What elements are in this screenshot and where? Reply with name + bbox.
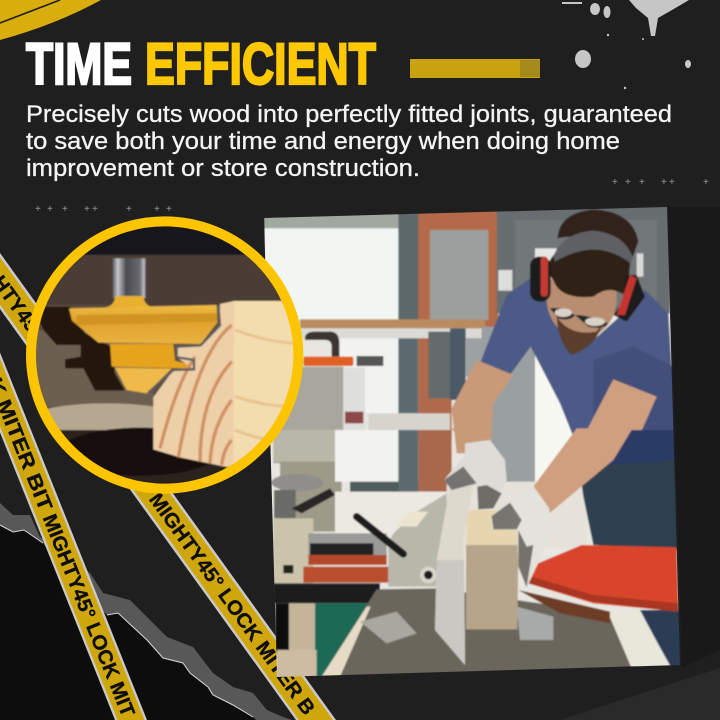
red disc bbox=[528, 545, 679, 612]
photo: man using router table bbox=[264, 203, 681, 678]
left glove bbox=[444, 439, 508, 482]
blurred backdrop bbox=[36, 226, 282, 484]
black fence profile bbox=[33, 307, 125, 391]
plus marks: right: + bbox=[661, 177, 667, 188]
wheel and vice bbox=[271, 474, 323, 491]
yellow ring bbox=[31, 221, 298, 489]
corner swoosh: yellow bbox=[0, 0, 101, 40]
bit shank bbox=[113, 258, 147, 298]
table top bbox=[334, 588, 632, 675]
window and wall bbox=[264, 203, 670, 483]
paint splatter bbox=[562, 0, 691, 89]
torn paper corner bbox=[0, 503, 292, 720]
plus marks: right bbox=[612, 177, 709, 188]
heading accent bar bbox=[410, 59, 540, 78]
title bbox=[26, 32, 376, 97]
jeans bbox=[581, 458, 677, 550]
clamp bbox=[388, 493, 448, 587]
body text: to save both your time and energy when doing home bbox=[26, 128, 620, 155]
tape: upper diagonal bbox=[0, 253, 336, 720]
plus marks: right: + bbox=[669, 177, 675, 188]
machine box bbox=[273, 367, 450, 463]
yellow router bit bbox=[69, 296, 217, 393]
tape: lower diagonal bbox=[0, 352, 147, 720]
plus marks: right: + bbox=[703, 177, 709, 188]
body text: Precisely cuts wood into perfectly fitted joints, guaranteed bbox=[26, 101, 672, 128]
forearms bbox=[451, 428, 455, 432]
plus marks: right: + bbox=[625, 177, 631, 188]
plus marks: right: + bbox=[612, 177, 618, 188]
title: EFFICIENT bbox=[145, 32, 376, 97]
magnifier circle: router bit close-up bbox=[27, 220, 303, 493]
plus marks: left: + bbox=[154, 204, 160, 215]
body text: improvement or store construction. bbox=[26, 155, 420, 182]
tape: upper diagonal: MIGHTY45° LOCK MITER B bbox=[144, 489, 319, 719]
plus marks: left: + bbox=[47, 204, 53, 215]
handle on orange base bbox=[303, 332, 383, 366]
title: TIME bbox=[26, 32, 132, 97]
shirt bbox=[480, 278, 674, 435]
wood block bbox=[467, 510, 518, 545]
white fence plate bbox=[435, 485, 473, 665]
plus marks: right: + bbox=[639, 177, 645, 188]
body text bbox=[26, 101, 672, 182]
lower scene bbox=[271, 428, 681, 678]
tape: lower diagonal: MIGHTY45° LOCK MIT bbox=[38, 511, 139, 720]
left arm bbox=[452, 360, 513, 453]
right glove bbox=[492, 486, 551, 587]
plus marks: left: + bbox=[92, 204, 98, 215]
plus marks: left: + bbox=[166, 204, 172, 215]
head bbox=[530, 209, 645, 355]
plus marks: left: + bbox=[35, 204, 41, 215]
plus marks: left: + bbox=[126, 204, 132, 215]
plus marks: left bbox=[35, 204, 172, 215]
plus marks: left: + bbox=[62, 204, 68, 215]
pine wood block bbox=[148, 301, 297, 468]
right arm bbox=[587, 378, 658, 432]
plus marks: left: + bbox=[84, 204, 90, 215]
